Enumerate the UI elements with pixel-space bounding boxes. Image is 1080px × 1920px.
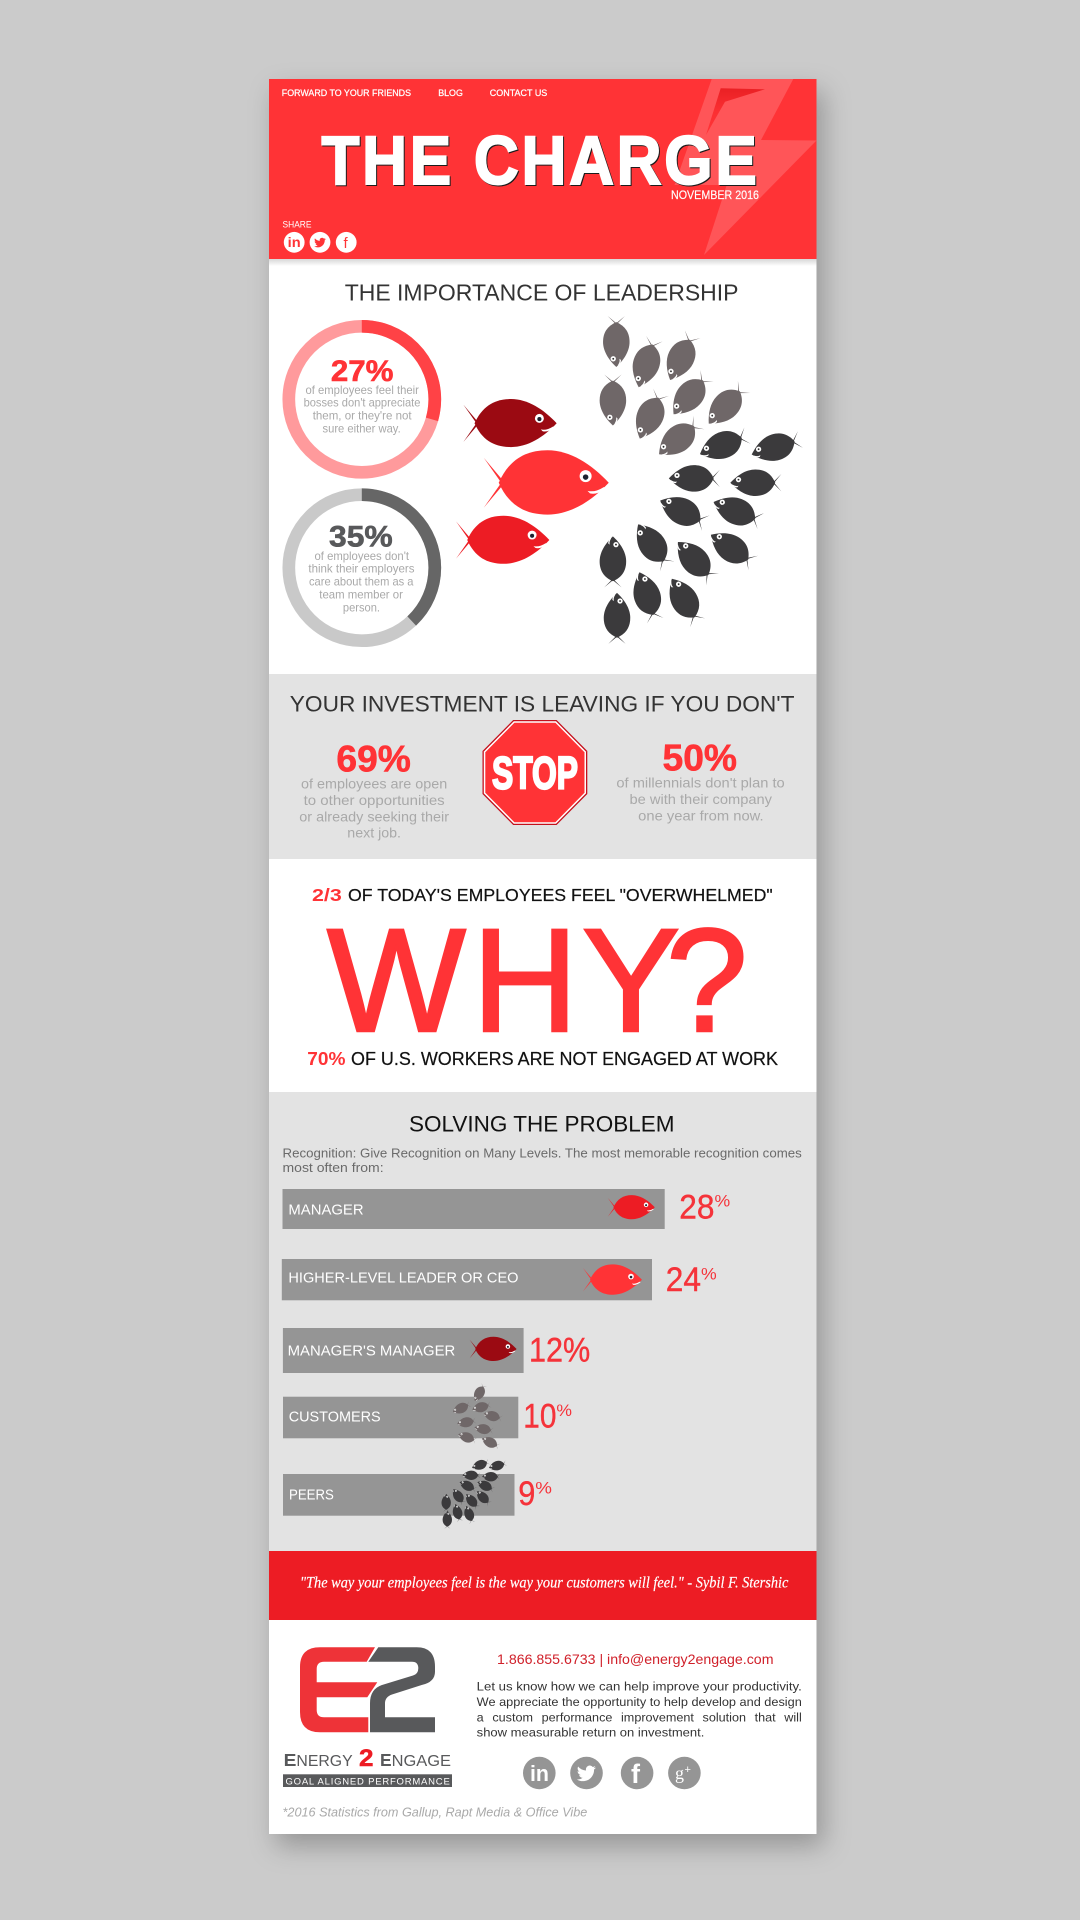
share icons: f (344, 235, 348, 252)
bar: peers 9%: 9 (518, 1475, 535, 1513)
social icons: + (684, 1764, 691, 1776)
bar: peers 9%: % (535, 1478, 552, 1497)
logo: wordmark: E (284, 1750, 296, 1770)
dark fish school (600, 423, 804, 644)
logo: wordmark: NGAGE (392, 1753, 451, 1770)
navigation links: BLOG (438, 88, 463, 99)
stat: 50%: one year from now. (638, 809, 764, 824)
not engaged line: 70% (307, 1049, 346, 1069)
leader fish (456, 399, 609, 564)
bar: manager's manager 12%: 12% (529, 1332, 590, 1370)
bar: higher-level leader 24% (282, 1259, 717, 1300)
share icons (284, 232, 357, 253)
footnote: *2016 Statistics from Gallup, Rapt Media & Office Vibe (282, 1806, 587, 1820)
share icons: in (288, 235, 301, 250)
stat: 69%: to other opportunities (304, 793, 445, 808)
stat: 50%: 50% (662, 738, 737, 779)
donut: 35% (289, 495, 435, 641)
logo: wordmark (284, 1745, 451, 1772)
not engaged line: OF U.S. WORKERS ARE NOT ENGAGED AT WORK (351, 1049, 778, 1069)
panel: the importance of leadership (289, 280, 804, 644)
page card with shadow (269, 79, 816, 1834)
bar: manager 28%: MANAGER (288, 1201, 364, 1218)
stat: 69% (299, 739, 449, 841)
bar: manager 28% (282, 1188, 730, 1229)
stat: 50%: of millennials don't plan to (616, 775, 785, 790)
gray fish school (600, 316, 754, 465)
donut: 27%: them, or they're not (313, 409, 412, 423)
bar: customers 10% (283, 1382, 572, 1451)
icon: stop sign (482, 720, 587, 825)
panel: header (269, 79, 816, 259)
stat: 50%: be with their company (630, 792, 772, 807)
navigation links: FORWARD TO YOUR FRIENDS (282, 88, 411, 99)
stat: 69%: or already seeking their (299, 810, 449, 825)
donut: 35%: person. (343, 600, 380, 614)
bar: manager 28%: % (714, 1192, 730, 1211)
bar: higher-level leader 24%: 24 (666, 1261, 701, 1299)
logo: wordmark: 2 (359, 1745, 374, 1772)
panel: why (307, 885, 778, 1069)
share label: SHARE (282, 220, 312, 231)
donut: 27%: of employees feel their (306, 383, 419, 397)
bar: peers 9% (283, 1457, 552, 1529)
overwhelmed line: 2/3 (312, 885, 342, 905)
logo: tagline: GOAL ALIGNED PERFORMANCE (286, 1776, 450, 1787)
donut: 27% (289, 326, 435, 472)
contact paragraph: a custom performance improvement solution that will (477, 1710, 802, 1724)
stat: 50% (616, 738, 785, 824)
panel: solving the problem (269, 1092, 816, 1551)
social icons: f (631, 1759, 641, 1789)
stat: 69%: 69% (336, 739, 411, 780)
donut: 27%: bosses don't appreciate (304, 396, 421, 410)
donut: 35%: 35% (329, 521, 393, 554)
heading: SOLVING THE PROBLEM (409, 1111, 674, 1136)
donut: 35%: care about them as a (309, 574, 414, 588)
bar: higher-level leader 24%: % (701, 1264, 717, 1283)
bar: peers 9%: PEERS (289, 1486, 334, 1503)
bar: customers 10%: 10 (523, 1398, 556, 1436)
date: NOVEMBER 2016 (671, 190, 759, 202)
social icons: g (675, 1763, 684, 1783)
donut: 35%: think their employers (308, 562, 415, 576)
contact paragraph: show measurable return on investment. (477, 1726, 704, 1740)
header shadow (269, 259, 816, 266)
overwhelmed line: OF TODAY'S EMPLOYEES FEEL "OVERWHELMED" (348, 885, 773, 905)
bar: manager 28%: 28 (679, 1188, 714, 1226)
stat: 69%: next job. (347, 826, 401, 841)
social icons: in (530, 1761, 549, 1786)
intro text: Recognition: Give Recognition on Many Levels. The most memorable recognition comes (282, 1145, 802, 1160)
icon: lightning bolt (674, 79, 816, 255)
logo: wordmark: NERGY (296, 1753, 353, 1770)
icon: stop sign: STOP (492, 748, 578, 798)
stat: 69%: of employees are open (301, 776, 447, 791)
contact paragraph: We appreciate the opportunity to help develop and design (477, 1695, 802, 1709)
panel: quote banner (269, 1551, 816, 1620)
donut: 27%: 27% (331, 355, 394, 388)
intro text (282, 1145, 802, 1175)
heading: YOUR INVESTMENT IS LEAVING IF YOU DON'T (290, 692, 794, 717)
navigation links (282, 88, 547, 99)
panel: footer (282, 1647, 802, 1820)
navigation links: CONTACT US (490, 88, 547, 99)
bar: manager's manager 12% (283, 1328, 590, 1373)
donut: 27%: sure either way. (322, 422, 401, 436)
panel: your investment is leaving (269, 674, 816, 859)
logo: E2 mark (300, 1647, 435, 1732)
social icons (523, 1757, 701, 1789)
contact paragraph: Let us know how we can help improve your productivity. (477, 1680, 802, 1694)
contact paragraph (477, 1680, 802, 1740)
logo: wordmark: E (380, 1750, 392, 1770)
heading: THE IMPORTANCE OF LEADERSHIP (345, 280, 738, 306)
bar: higher-level leader 24%: HIGHER-LEVEL LEADER OR CEO (288, 1270, 518, 1287)
title: THE CHARGE (322, 122, 760, 199)
bar: customers 10%: % (556, 1401, 572, 1420)
big why: WHY? (327, 899, 748, 1063)
donut: 35%: of employees don't (314, 549, 410, 563)
intro text: most often from: (282, 1160, 384, 1175)
donut: 35%: team member or (319, 587, 403, 601)
contact line: 1.866.855.6733 | info@energy2engage.com (497, 1651, 774, 1667)
panel: quote banner: "The way your employees feel is the way your customers will feel." - Sybil F. Stershic (300, 1575, 788, 1592)
bar: manager's manager 12%: MANAGER'S MANAGER (288, 1342, 455, 1359)
bar: customers 10%: CUSTOMERS (289, 1409, 381, 1426)
